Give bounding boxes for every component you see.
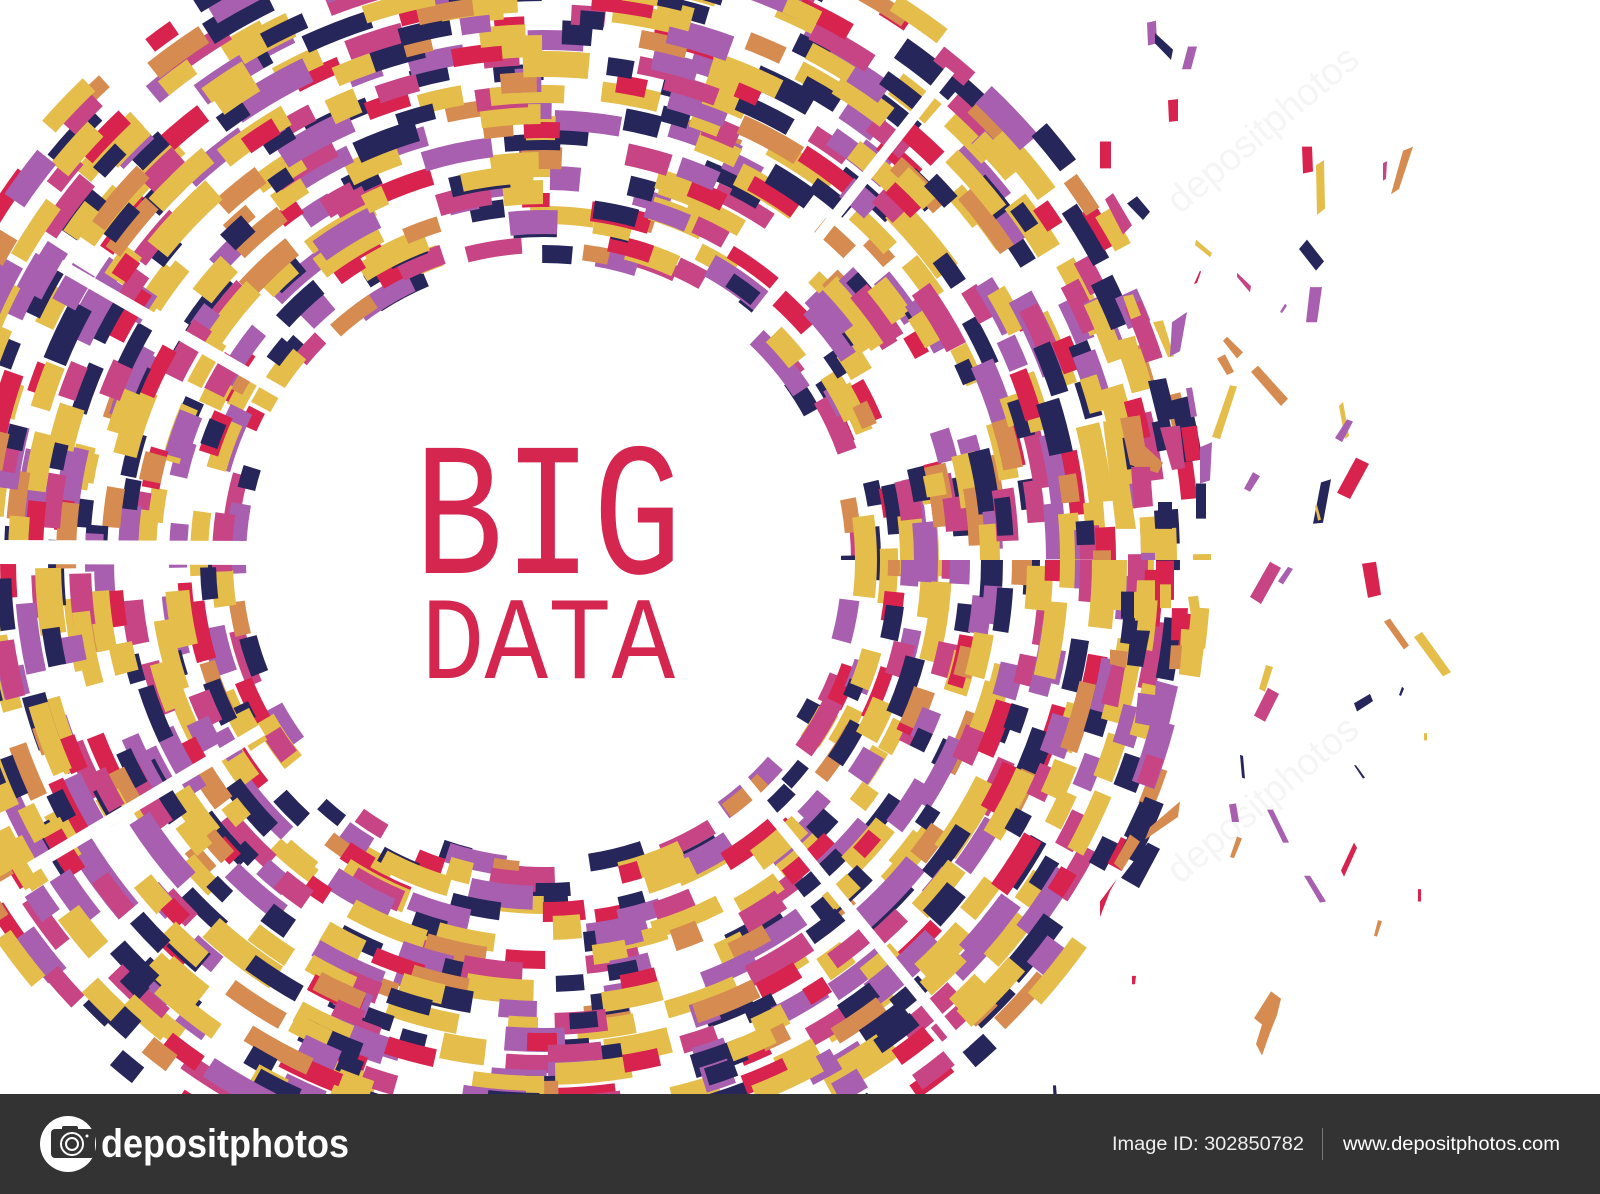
watermark text: depositphotos: [1159, 708, 1367, 892]
title: BIG DATA: BIG: [414, 416, 682, 631]
ring band: inner: [174, 190, 914, 930]
ring band: outer: [0, 0, 1202, 1194]
ring band: middle outer: [14, 30, 1074, 1090]
title: BIG DATA: [414, 416, 682, 714]
ring band: filler layer: [0, 0, 1194, 1194]
scattered fragments: lower right: [1053, 561, 1451, 1112]
white radial gaps between ring sectors: [0, 70, 965, 1050]
watermark text: depositphotos: [1159, 38, 1367, 222]
icon: camera logo: [40, 1116, 96, 1172]
title: BIG DATA: DATA: [421, 581, 675, 714]
logo wordmark: depositphotos: [101, 1122, 349, 1166]
concentric data ring: [0, 0, 1202, 1194]
footer bar: [0, 1094, 1600, 1194]
website url: www.depositphotos.com: [1342, 1134, 1560, 1155]
image id: Image ID: 302850782: [1112, 1134, 1304, 1155]
ring band: middle inner: [94, 110, 994, 1010]
scattered fragments: upper right: [1100, 21, 1413, 529]
watermark text: [1159, 38, 1367, 892]
